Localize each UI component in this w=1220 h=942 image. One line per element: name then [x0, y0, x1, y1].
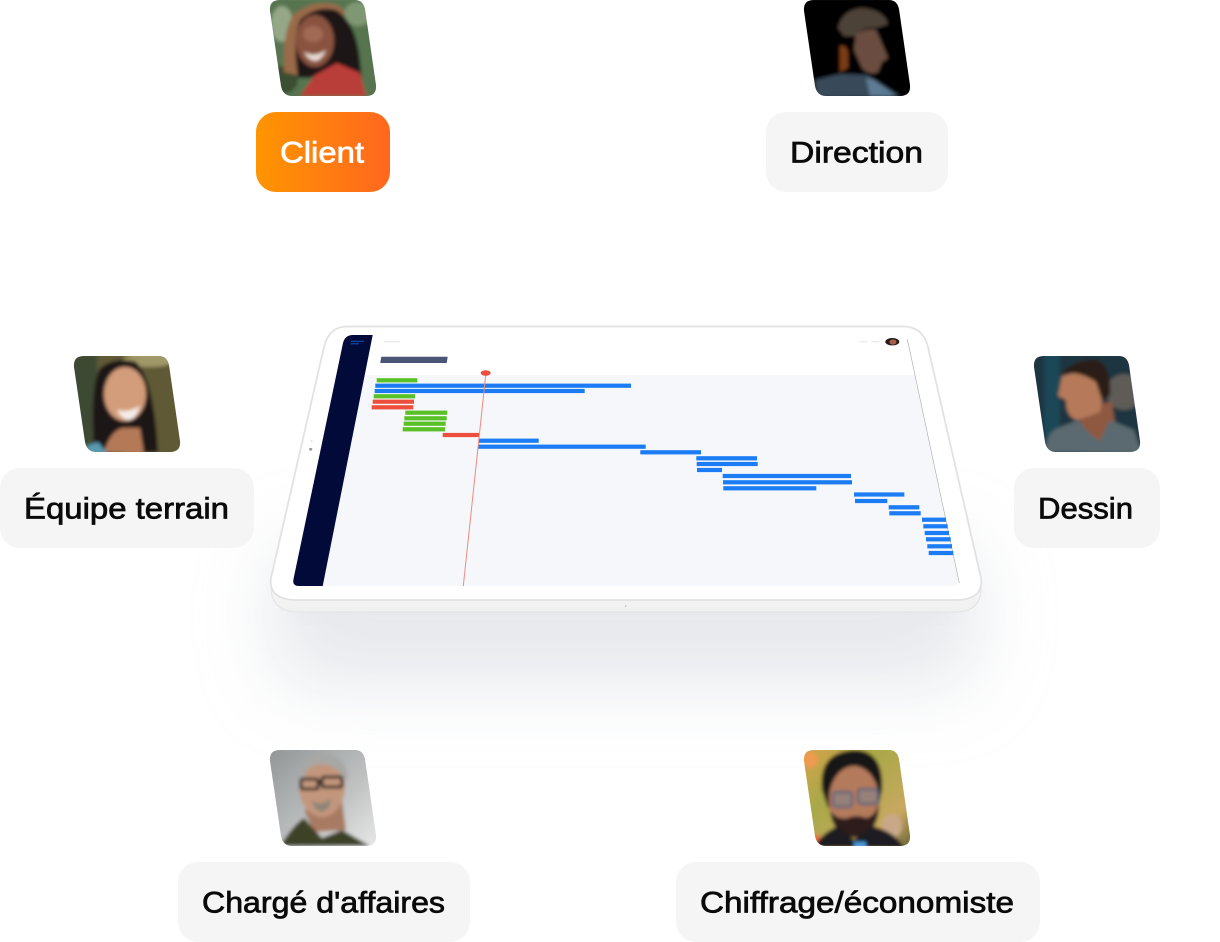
avatar: direction	[804, 0, 910, 96]
label: dessin: Dessin	[1038, 492, 1133, 526]
tablet	[271, 326, 981, 612]
tablet lower edge	[271, 580, 981, 612]
label: équipe terrain	[0, 468, 254, 548]
tablet drop shadow	[275, 545, 975, 685]
avatar: équipe terrain	[74, 356, 180, 452]
header placeholders	[384, 341, 879, 342]
avatar: dessin	[1034, 356, 1140, 452]
blue tasks	[375, 384, 953, 555]
screen title bar	[380, 357, 448, 363]
today marker	[463, 370, 491, 586]
screen sidebar	[293, 335, 373, 586]
avatar: chargé d'affaires	[270, 750, 376, 846]
tablet body	[271, 326, 981, 600]
label: dessin	[1014, 468, 1160, 548]
label: chiffrage/économiste: Chiffrage/économiste	[700, 886, 1014, 920]
label: chargé d'affaires: Chargé d'affaires	[202, 886, 445, 920]
tablet screen background	[323, 375, 958, 586]
sidebar menu icon	[351, 341, 364, 344]
label: chiffrage/économiste	[676, 862, 1040, 942]
avatar: client	[270, 0, 376, 96]
tablet side buttons	[309, 440, 626, 607]
green and red early tasks	[372, 378, 479, 437]
avatar: chiffrage/économiste	[804, 750, 910, 846]
gantt chart	[372, 378, 953, 555]
label: direction	[766, 112, 948, 192]
label: chargé d'affaires	[178, 862, 470, 942]
label: client	[256, 112, 390, 192]
label: équipe terrain: Équipe terrain	[24, 492, 229, 526]
label: client: Client	[280, 136, 365, 170]
header user avatar	[885, 338, 899, 345]
screen right edge line	[907, 339, 959, 583]
label: direction: Direction	[790, 136, 923, 170]
